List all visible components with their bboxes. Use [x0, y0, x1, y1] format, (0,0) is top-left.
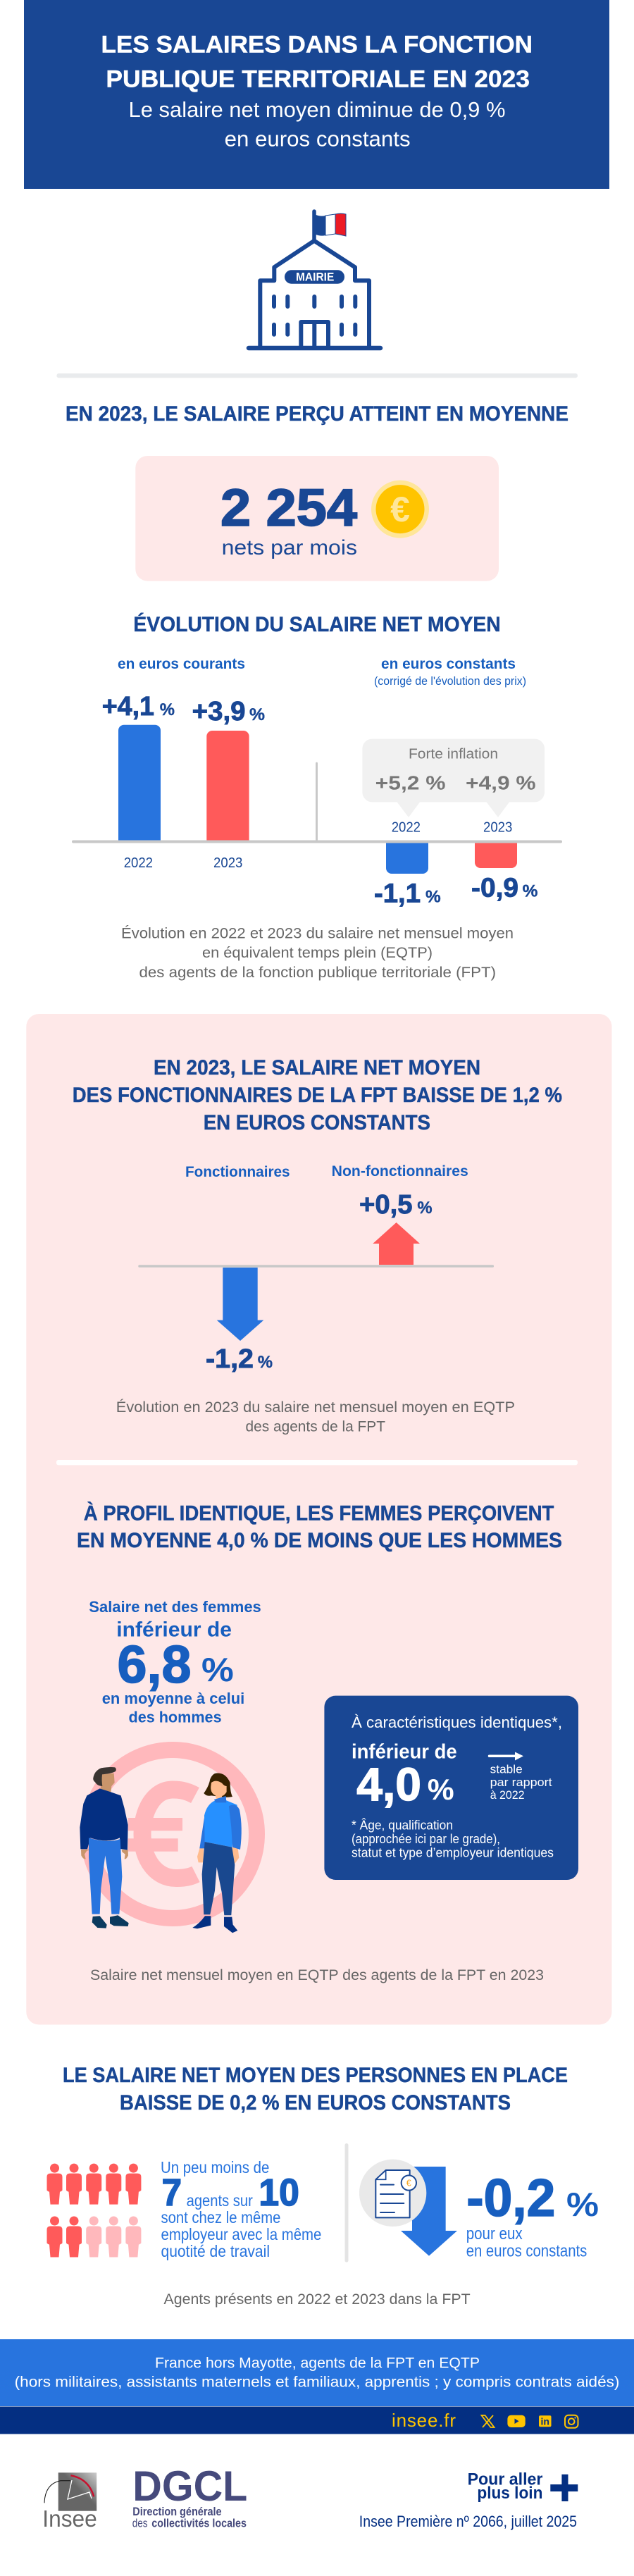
bar: 2022 current [118, 725, 161, 840]
callout: strong inflation: Forte inflation [409, 747, 498, 762]
icon: town hall with French flag: MAIRIE [296, 271, 334, 284]
panel: identical characteristics: À caractéristiques identiques*, [352, 1714, 562, 1731]
value: -1,1 % [374, 879, 441, 909]
icon: LinkedIn: in [541, 2415, 549, 2427]
year labels: 2023 [483, 820, 512, 836]
panel: civil servants and gender gap [26, 1014, 612, 2025]
subtitle: Le salaire net moyen diminue de 0,9 % [128, 97, 506, 122]
link: further reading: plus loin [477, 2484, 542, 2503]
value: -1,2 %: % [258, 1353, 273, 1372]
logo: DGCL: collectivités locales [151, 2517, 247, 2530]
link: further reading [468, 2470, 578, 2503]
logo: DGCL: DGCL [132, 2463, 247, 2510]
bar: 2023 constant [475, 843, 517, 868]
text block: women's salary 6,8 %: Salaire net des femmes [89, 1598, 261, 1616]
arrow: stable [489, 1755, 516, 1757]
caption: agents present: Agents présents en 2022 et 2023 dans la FPT [163, 2291, 471, 2308]
text block: -0,2 %: pour eux [466, 2224, 523, 2243]
figure: woman [192, 1773, 242, 1933]
text block: women's salary 6,8 %: en moyenne à celui [102, 1690, 244, 1707]
text block: women's salary 6,8 % [89, 1598, 261, 1726]
text block: 7 agents sur 10: quotité de travail [161, 2242, 270, 2260]
logo: Insee [42, 2472, 97, 2532]
main title: LES SALAIRES DANS LA FONCTION [101, 31, 533, 58]
link: insee.fr: insee.fr [392, 2410, 456, 2431]
heading: civil servants: DES FONCTIONNAIRES DE LA FPT BAISSE DE 1,2 % [73, 1084, 562, 1107]
heading: gender gap: À PROFIL IDENTIQUE, LES FEMMES PERÇOIVENT [84, 1501, 554, 1525]
caption: evolution chart [121, 926, 514, 981]
text block: -0,2 %: -0,2 [466, 2168, 555, 2227]
value: +3,9 %: +3,9 [192, 697, 245, 726]
heading: people staying in place: BAISSE DE 0,2 % EN EUROS CONSTANTS [120, 2091, 511, 2114]
chart: euros courants [102, 656, 265, 871]
heading: civil servants: EN EUROS CONSTANTS [204, 1111, 430, 1134]
caption: evolution chart: en équivalent temps plein (EQTP) [202, 945, 433, 961]
text block: 7 agents sur 10: employeur avec la même [161, 2225, 321, 2243]
text block: women's salary 6,8 %: inférieur de [116, 1618, 232, 1641]
callout: strong inflation: +5,2 % [375, 772, 446, 793]
footnote: (approchée ici par le grade), [352, 1832, 500, 1846]
text: stable compared to 2022: stable [490, 1762, 523, 1776]
caption: gender gap: Salaire net mensuel moyen en EQTP des agents de la FPT en 2023 [90, 1967, 544, 1983]
note: price correction: (corrigé de l'évolution des prix) [374, 674, 526, 688]
bar: 2022 constant [386, 843, 428, 874]
arrow: up, non-civil servants [373, 1222, 420, 1265]
label: en euros constants: en euros constants [381, 656, 516, 672]
value: +4,1 %: +4,1 [102, 692, 154, 722]
text: stable compared to 2022 [490, 1762, 552, 1802]
icon: town hall with French flag [249, 211, 380, 348]
callout: strong inflation: +4,9 % [466, 772, 536, 793]
text block: -0,2 %: en euros constants [466, 2242, 587, 2261]
band: scope note: France hors Mayotte, agents de la FPT en EQTP [155, 2355, 480, 2372]
icon: Instagram [565, 2415, 578, 2428]
chart: euros constants [362, 656, 545, 909]
value: -0,9 %: % [523, 882, 538, 901]
text block: women's salary 6,8 %: 6,8 [117, 1635, 192, 1694]
year labels [392, 820, 512, 836]
main title: PUBLIQUE TERRITORIALE EN 2023 [106, 66, 530, 92]
header banner [24, 0, 609, 189]
label: en euros courants: en euros courants [118, 656, 245, 672]
icon: X [482, 2415, 495, 2427]
value: +0,5 %: % [417, 1199, 433, 1218]
heading: gender gap: EN MOYENNE 4,0 % DE MOINS QUE LES HOMMES [77, 1529, 562, 1552]
text block: 7 agents sur 10: agents sur [187, 2191, 253, 2210]
value: -0,9 % [471, 874, 538, 903]
value: -0,9 %: -0,9 [471, 874, 518, 903]
heading: people staying in place [63, 2064, 568, 2114]
illustration: man and woman with euro symbol [80, 1750, 256, 1933]
pictogram: 7 agents out of 10 [46, 2164, 141, 2258]
heading: people staying in place: LE SALAIRE NET MOYEN DES PERSONNES EN PLACE [63, 2064, 568, 2087]
panel: identical characteristics: inférieur de [352, 1740, 457, 1763]
value: -1,1 %: % [425, 888, 441, 907]
text block: 7 agents sur 10: Un peu moins de [161, 2158, 269, 2176]
heading: gender gap [77, 1501, 562, 1552]
logo: DGCL [132, 2463, 247, 2530]
heading: civil servants [73, 1056, 562, 1134]
callout: strong inflation [362, 739, 545, 817]
text block: 7 agents sur 10: 10 [259, 2172, 299, 2214]
footnote: statut et type d’employeur identiques [352, 1846, 554, 1860]
label: Fonctionnaires: Fonctionnaires [185, 1164, 290, 1180]
value: +3,9 %: % [249, 705, 265, 724]
panel: identical characteristics: % [428, 1773, 454, 1806]
heading: evolution: ÉVOLUTION DU SALAIRE NET MOYEN [133, 612, 501, 636]
icon: plus [550, 2475, 578, 2501]
amount: 2 254 [220, 478, 357, 537]
icon: euro coin: € [390, 490, 410, 529]
value: -1,1 %: -1,1 [374, 879, 421, 909]
link: further reading: Pour aller [468, 2470, 542, 2489]
band: scope note: (hors militaires, assistants maternels et familiaux, apprentis ; y compris contrats aidés) [15, 2374, 619, 2390]
panel: identical characteristics [324, 1696, 578, 1880]
footnote [352, 1818, 554, 1860]
year labels: 2023 [213, 855, 242, 871]
heading: civil servants: EN 2023, LE SALAIRE NET MOYEN [154, 1056, 480, 1079]
bar: 2023 current [206, 731, 249, 840]
caption: evolution chart: Évolution en 2022 et 2023 du salaire net mensuel moyen [121, 926, 514, 942]
arrow: down, civil servants [217, 1268, 263, 1341]
icon: YouTube [507, 2415, 526, 2427]
year labels: 2022 [392, 820, 421, 836]
caption: civil servants: Évolution en 2023 du salaire net mensuel moyen en EQTP [116, 1399, 515, 1416]
footnote: * Âge, qualification [352, 1818, 453, 1832]
subtitle: en euros constants [225, 127, 411, 151]
heading: average salary: EN 2023, LE SALAIRE PERÇU ATTEINT EN MOYENNE [66, 402, 568, 426]
icon: euro ring [89, 1750, 256, 1918]
subtitle [128, 97, 506, 151]
text block: women's salary 6,8 %: % [201, 1651, 234, 1688]
year labels [124, 855, 242, 871]
value: +0,5 %: +0,5 [359, 1190, 413, 1220]
text block: 7 agents sur 10 [161, 2158, 321, 2260]
icon: euro coin [371, 481, 429, 538]
source reference: Insee Première nº 2066, juillet 2025 [359, 2513, 577, 2530]
text: stable compared to 2022: par rapport [490, 1776, 552, 1789]
text block: 7 agents sur 10: sont chez le même [161, 2208, 280, 2227]
text block: 7 agents sur 10: 7 [162, 2172, 182, 2214]
caption: evolution chart: des agents de la fonction publique territoriale (FPT) [139, 965, 496, 981]
caption: civil servants [116, 1399, 515, 1435]
band: website and social links [0, 2407, 634, 2434]
icon: down arrow with payslip [359, 2160, 457, 2256]
text block: women's salary 6,8 %: des hommes [128, 1708, 222, 1726]
logo: Insee: Insee [42, 2506, 97, 2532]
value: -1,2 % [206, 1344, 273, 1374]
main title [101, 31, 533, 92]
logo: DGCL: Direction générale [132, 2505, 222, 2518]
caption: civil servants: des agents de la FPT [245, 1419, 385, 1435]
text: stable compared to 2022: à 2022 [490, 1788, 524, 1802]
panel: net monthly salary [135, 456, 499, 581]
band: scope note [0, 2339, 634, 2406]
text block: -0,2 % [466, 2168, 599, 2261]
value: -1,2 %: -1,2 [206, 1344, 254, 1374]
text block: -0,2 %: % [566, 2186, 599, 2223]
logo: DGCL: des [132, 2517, 148, 2530]
panel: identical characteristics: 4,0 [356, 1758, 421, 1810]
label: Non-fonctionnaires: Non-fonctionnaires [332, 1163, 468, 1179]
value: +4,1 %: % [160, 700, 175, 719]
icon: down arrow with payslip: € [406, 2179, 411, 2188]
year labels: 2022 [124, 855, 153, 871]
figure: man [80, 1767, 129, 1928]
unit label: nets par mois [222, 536, 357, 559]
